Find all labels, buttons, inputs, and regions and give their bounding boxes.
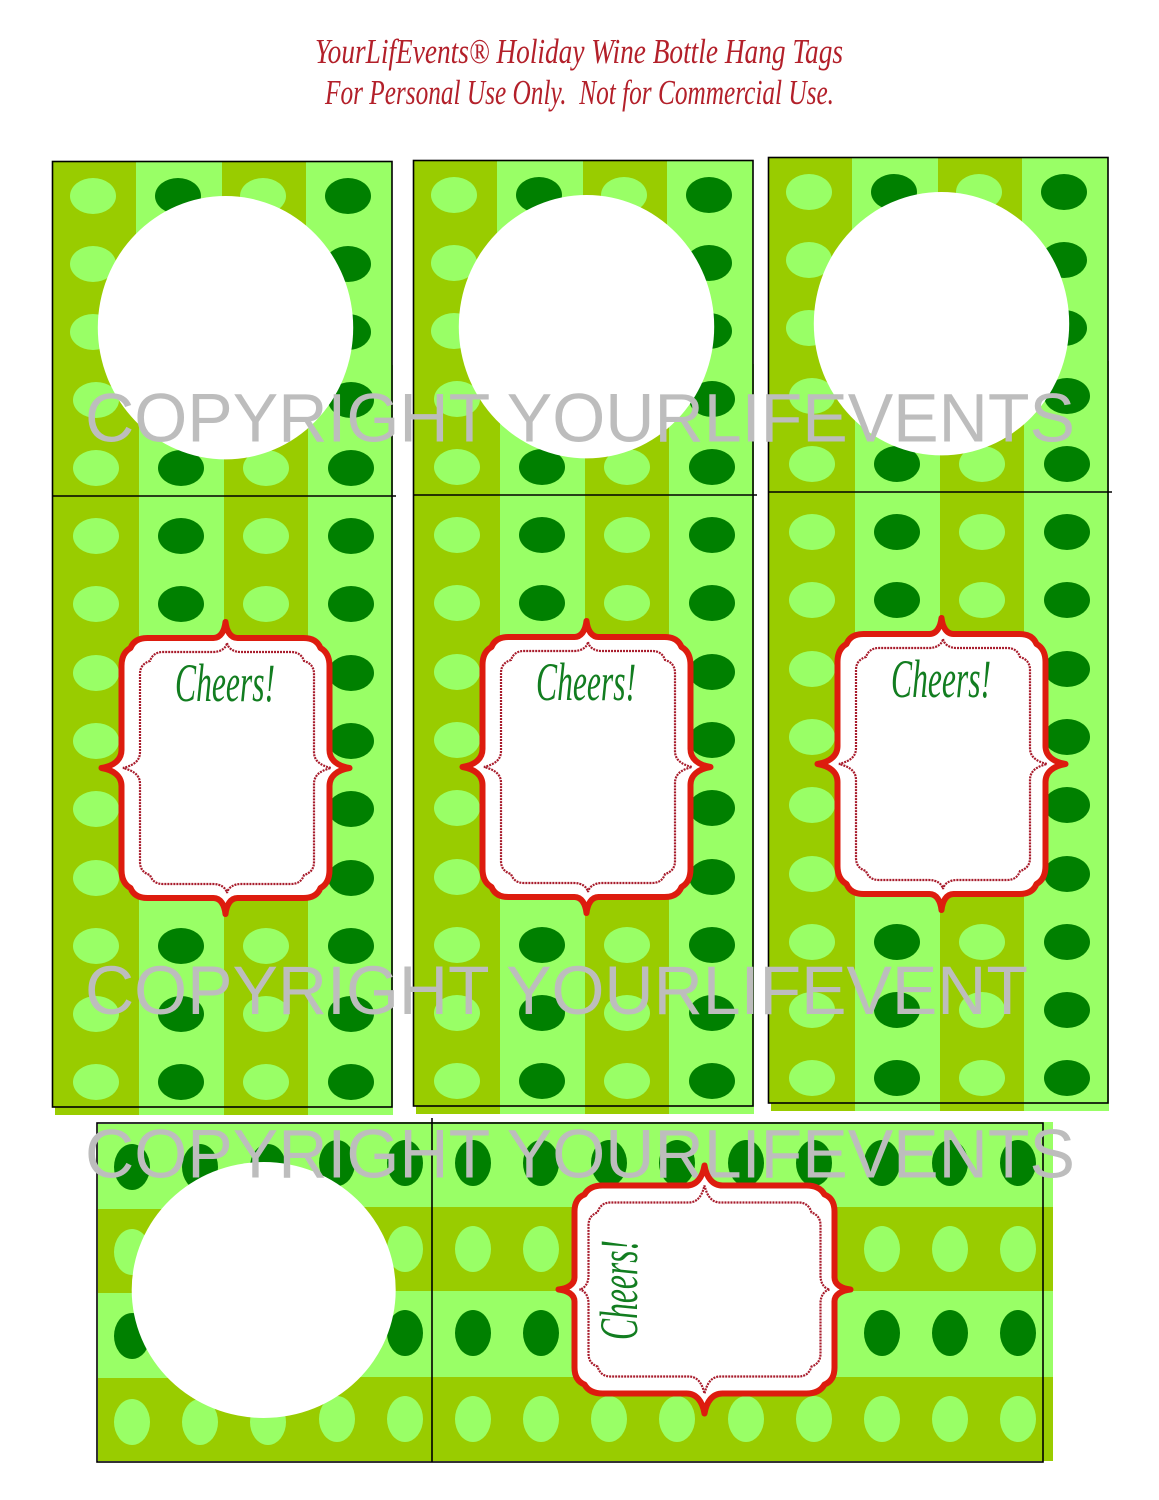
bottle neck hole (814, 192, 1069, 455)
fold line and tag outline (97, 1118, 1043, 1462)
panel: vertical tag 2 (414, 160, 757, 1114)
red bracket label frame (462, 621, 710, 913)
title: For Personal Use Only. Not for Commercial Use. (324, 73, 834, 112)
cheers text: Cheers! (175, 653, 275, 713)
cheers text: Cheers! (536, 652, 636, 712)
bottle neck hole (132, 1162, 396, 1418)
title (315, 32, 843, 112)
red bracket label frame (558, 1166, 850, 1414)
fold line and tag outline (52, 162, 396, 1107)
watermark: row 1: COPYRIGHT YOURLIFEVENTS (85, 380, 1075, 456)
red bracket label frame (102, 622, 350, 914)
watermark: row 2: COPYRIGHT YOURLIFEVENT (85, 952, 1028, 1029)
panel: horizontal tag (85, 1116, 1075, 1462)
watermark: row 3: COPYRIGHT YOURLIFEVENTS (85, 1116, 1075, 1192)
bottle neck hole (98, 196, 353, 459)
bottle neck hole (459, 195, 714, 458)
fold line and tag outline (414, 160, 757, 1106)
red bracket label frame (818, 618, 1066, 910)
cheers text: Cheers! (891, 649, 991, 709)
cheers text rotated: Cheers! (589, 1240, 649, 1340)
panel: vertical tag 3 (768, 157, 1112, 1111)
fold line and tag outline (768, 158, 1112, 1103)
panel: vertical tag 1 (52, 161, 396, 1115)
title: YourLifEvents® Holiday Wine Bottle Hang Tags (315, 32, 843, 71)
